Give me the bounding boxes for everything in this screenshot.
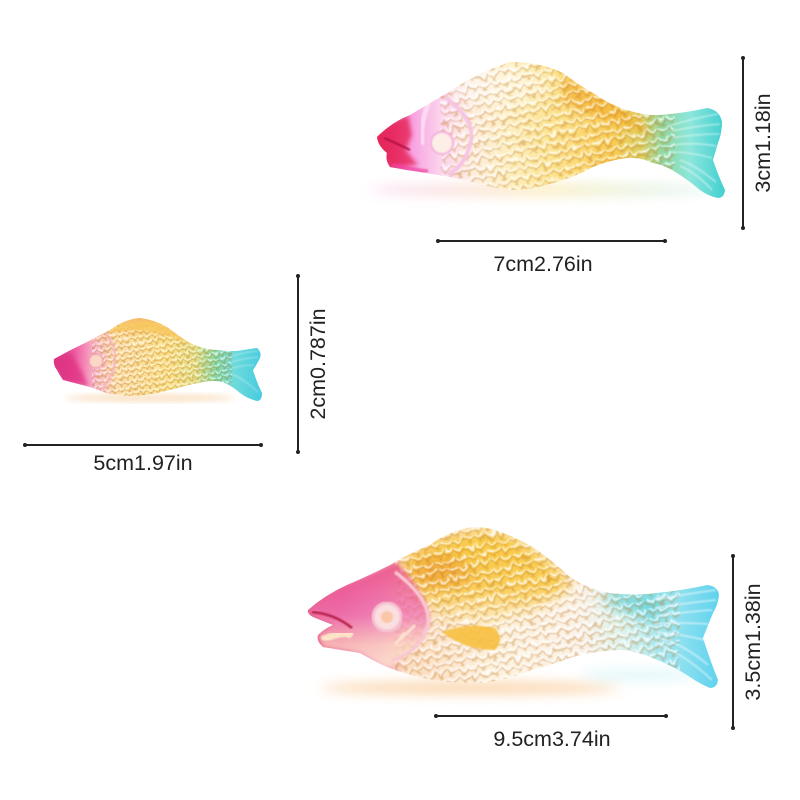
dimension: 9.5cm width: 9.5cm3.74in — [493, 727, 611, 751]
dimension: 3.5cm height: 3.5cm1.38in — [741, 583, 765, 701]
dimension: 7cm width: 7cm2.76in — [493, 252, 593, 276]
dimension: 2cm height: 2cm0.787in — [306, 308, 330, 420]
tail fin — [672, 114, 720, 190]
shadow — [370, 184, 710, 196]
head — [377, 98, 472, 175]
tail fin — [232, 351, 258, 392]
fish: medium 7cm — [370, 55, 730, 205]
dimension: 2cm height — [296, 274, 330, 454]
dimension: 7cm width — [436, 239, 667, 276]
dimension: 5cm width: 5cm1.97in — [93, 451, 193, 475]
head — [308, 562, 430, 667]
fish: small 5cm — [50, 315, 265, 405]
shadow — [65, 394, 235, 402]
head — [54, 333, 115, 391]
tail fin — [655, 590, 716, 680]
dimension: 5cm width — [23, 443, 263, 475]
fish: large 9.5cm — [300, 520, 725, 695]
dimension: 3.5cm height — [731, 554, 765, 730]
dimension: 3cm height: 3cm1.18in — [751, 93, 775, 193]
shadow — [320, 682, 620, 694]
dimension: 3cm height — [741, 56, 775, 230]
dimension: 9.5cm width — [434, 714, 668, 751]
